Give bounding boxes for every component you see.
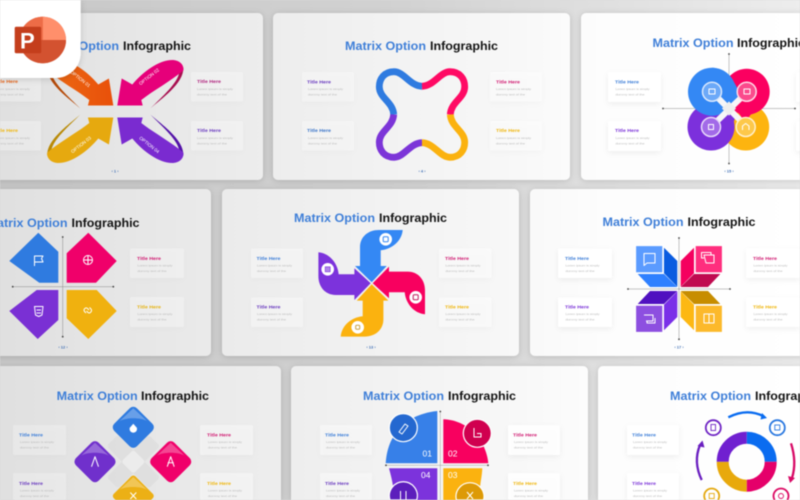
card: bottom right: Lorem ipsum is simply	[138, 312, 173, 316]
card: top left: Title Here	[256, 256, 281, 261]
chart: clover ribbon	[379, 72, 465, 157]
card: bottom right: dummy text of the	[138, 318, 167, 322]
title: Matrix Option	[363, 389, 444, 403]
card: bottom right: dummy text of the	[496, 142, 526, 146]
title: Matrix Option	[652, 36, 734, 50]
card: top right: Title Here	[137, 256, 162, 261]
option labels: OPTION 04	[138, 135, 161, 154]
panel: slide 13 pinwheel arrows	[222, 189, 519, 356]
quadrant 02 magenta	[443, 419, 491, 463]
card: top right: Lorem ipsum is simply	[197, 87, 234, 91]
card: top left: Title Here	[565, 256, 590, 261]
card: top left	[320, 425, 372, 455]
card: bottom left: dummy text of the	[20, 494, 50, 498]
arrow: purple arc	[697, 440, 704, 480]
card: bottom left: Title Here	[632, 481, 657, 486]
panel: slide donut	[598, 366, 800, 500]
card: top right: Title Here	[513, 432, 538, 438]
card: top left: Lorem ipsum is simply	[326, 440, 361, 444]
title: Infographic	[123, 39, 191, 53]
card: top left: Lorem ipsum is simply	[566, 264, 600, 268]
logo badge: PowerPoint	[0, 0, 81, 78]
card: top right	[439, 248, 492, 278]
card: top left	[608, 72, 661, 102]
card: bottom left: Title Here	[325, 481, 350, 486]
card: top left: Lorem ipsum is simply	[308, 87, 344, 91]
diamond: yellow	[113, 476, 154, 500]
title: Infographic	[141, 389, 209, 403]
title	[652, 36, 800, 50]
panel: slide 12 pentagons	[0, 189, 211, 356]
box: magenta	[681, 246, 722, 287]
arrow: purple	[318, 252, 371, 300]
title: Infographic	[688, 215, 756, 229]
card: bottom left: Title Here	[615, 128, 640, 133]
panel: slide numbered quadrants	[291, 366, 588, 500]
card: bottom left: dummy text of the	[566, 318, 595, 322]
title	[345, 39, 498, 53]
card: bottom right	[490, 121, 542, 150]
card: bottom left	[0, 121, 41, 150]
shape: yellow pentagon with link icon	[67, 290, 117, 339]
option labels: OPTION 02	[138, 67, 160, 86]
card: top right: dummy text of the	[138, 269, 167, 273]
axes	[662, 53, 796, 164]
card: bottom left: dummy text of the	[633, 494, 663, 498]
title	[0, 216, 140, 230]
card: bottom left: Lorem ipsum is simply	[633, 488, 668, 492]
card: top right: Title Here	[753, 256, 778, 261]
card: bottom right: dummy text of the	[208, 494, 238, 498]
card: top right: dummy text of the	[208, 446, 238, 450]
card: bottom right: Lorem ipsum is simply	[446, 312, 481, 316]
quadrant 01 blue: 01	[422, 448, 432, 458]
card: top right: Lorem ipsum is simply	[208, 440, 243, 444]
arrow: blue	[355, 230, 403, 282]
box: purple	[636, 291, 677, 332]
card: top right	[130, 248, 184, 278]
panel: slide 4 clover ribbon	[273, 13, 570, 180]
card: bottom left: Title Here	[565, 304, 590, 310]
page number: ‹ 13 ›	[366, 344, 376, 350]
card: bottom left: Lorem ipsum is simply	[308, 136, 344, 140]
diamond: magenta	[148, 439, 193, 484]
title: Matrix Option	[670, 389, 751, 403]
card: top left	[13, 425, 66, 455]
diamond: purple	[72, 439, 118, 484]
center diamond	[121, 450, 145, 474]
card: bottom right	[746, 298, 800, 327]
option labels: OPTION 03	[70, 135, 92, 154]
card: bottom right	[508, 473, 560, 500]
arrow: yellow	[341, 284, 388, 337]
card: top right: Title Here	[207, 432, 232, 438]
card: bottom right: Title Here	[445, 304, 470, 310]
card: bottom right: dummy text of the	[446, 318, 475, 322]
card: top left	[302, 72, 354, 102]
card: bottom right	[439, 298, 492, 327]
card: top left: dummy text of the	[566, 269, 595, 273]
card: bottom left: Lorem ipsum is simply	[20, 488, 55, 492]
card: bottom left	[251, 298, 303, 327]
card: bottom right: Title Here	[137, 304, 162, 310]
card: bottom left	[302, 121, 354, 150]
card: top right: Lorem ipsum is simply	[138, 264, 173, 268]
connector cross	[106, 435, 160, 489]
title	[670, 389, 800, 403]
shape: purple pentagon with shield icon	[9, 290, 58, 339]
card: top left: Lorem ipsum is simply	[616, 87, 650, 91]
card: bottom left: Lorem ipsum is simply	[257, 312, 293, 316]
option labels	[69, 67, 161, 154]
card: bottom right: Title Here	[496, 128, 521, 133]
card: bottom left: dummy text of the	[616, 142, 645, 146]
icon ring: yellow	[704, 488, 719, 500]
card: bottom left: Lorem ipsum is simply	[326, 488, 361, 492]
title	[602, 215, 756, 229]
card: top right: dummy text of the	[754, 269, 783, 273]
card: top left: dummy text of the	[633, 446, 663, 450]
title	[294, 211, 447, 225]
card: top right	[490, 72, 542, 102]
card: bottom left: Lorem ipsum is simply	[566, 312, 600, 316]
card: bottom left	[608, 121, 661, 151]
page number: ‹ 4 ›	[418, 168, 426, 174]
card: top right: Lorem ipsum is simply	[496, 87, 532, 91]
card: bottom left: dummy text of the	[326, 494, 356, 498]
card: right edge	[796, 72, 800, 151]
card: top left: dummy text of the	[616, 92, 645, 96]
card: bottom left: dummy text of the	[308, 142, 338, 146]
panel: slide 15 swirl circles	[581, 13, 800, 180]
card: top right	[508, 425, 560, 455]
arrow: option 04 purple	[117, 114, 183, 163]
card: top right: dummy text of the	[446, 269, 475, 273]
axes	[627, 237, 731, 340]
quadrant 01 blue	[386, 411, 437, 463]
card: top left: Lorem ipsum is simply	[20, 440, 55, 444]
icon ring: magenta	[774, 488, 788, 500]
card: top right: Lorem ipsum is simply	[446, 264, 481, 268]
icon ring: blue	[770, 420, 785, 435]
card: top left: dummy text of the	[257, 269, 287, 273]
card: bottom right: Lorem ipsum is simply	[514, 488, 549, 492]
title	[38, 39, 191, 53]
card: bottom left: dummy text of the	[257, 318, 287, 322]
title: Infographic	[72, 216, 140, 230]
card: top right: Title Here	[496, 80, 521, 84]
card: bottom left: Lorem ipsum is simply	[616, 136, 650, 140]
quadrant 03 yellow	[443, 468, 484, 500]
title: Matrix Option	[345, 39, 426, 53]
card: bottom left: Title Here	[307, 128, 332, 133]
card: bottom right: Lorem ipsum is simply	[496, 136, 532, 140]
card: bottom left	[13, 473, 66, 500]
icon ring: purple	[706, 420, 721, 435]
card: bottom left: Title Here	[256, 304, 281, 310]
card: top left	[558, 248, 612, 278]
card: bottom left	[320, 473, 372, 500]
card: top left: Title Here	[325, 432, 350, 438]
card: bottom right	[130, 297, 184, 327]
title: Matrix Option	[602, 215, 684, 229]
card: bottom right: dummy text of the	[514, 494, 544, 498]
card: bottom right: Title Here	[207, 481, 232, 486]
quadrant 02 magenta: 02	[448, 448, 458, 458]
card: top left: dummy text of the	[326, 446, 356, 450]
card: top right: Lorem ipsum is simply	[754, 264, 788, 268]
quadrant 03 yellow: 03	[448, 470, 458, 480]
card: top left: Title Here	[632, 432, 657, 438]
card: bottom right: Lorem ipsum is simply	[208, 488, 243, 492]
card: top left: dummy text of the	[20, 446, 50, 450]
chart: donut	[723, 438, 771, 486]
card: top right	[191, 72, 243, 102]
arrow: blue arc	[728, 412, 767, 420]
shape: blue pentagon with flag icon	[9, 233, 58, 283]
title: Infographic	[430, 39, 498, 53]
arrow: magenta arc	[788, 443, 795, 483]
card: top right: Title Here	[197, 79, 222, 84]
panel: slide 17 3d boxes	[530, 189, 800, 356]
chart: four swirl circles	[688, 68, 770, 150]
card: top left: Lorem ipsum is simply	[633, 440, 668, 444]
card: top right: Lorem ipsum is simply	[514, 440, 549, 444]
card: bottom right: Title Here	[513, 481, 538, 486]
axes	[12, 236, 114, 338]
card: bottom right: Lorem ipsum is simply	[197, 136, 234, 140]
card: top left	[251, 248, 303, 278]
card: bottom right: Title Here	[753, 304, 778, 310]
diamond: blue	[111, 405, 156, 450]
arrow: option 02 magenta	[117, 60, 183, 108]
card: top left: Lorem ipsum is simply	[257, 264, 293, 268]
card: bottom left	[627, 473, 679, 500]
title: Matrix Option	[294, 211, 375, 225]
title: Matrix Option	[38, 39, 119, 53]
icon: PowerPoint circle: P	[20, 28, 35, 54]
card: bottom right: dummy text of the	[754, 318, 783, 322]
card: bottom left: Title Here	[19, 481, 44, 486]
card: top left: dummy text of the	[308, 92, 338, 96]
panel: slide diamonds	[0, 366, 281, 500]
title: Matrix Option	[57, 389, 138, 403]
page number: ‹ 15 ›	[724, 168, 734, 174]
card: top left: Title Here	[615, 80, 640, 84]
title: Infographic	[448, 389, 516, 403]
card: bottom right	[200, 473, 253, 500]
box: blue	[636, 246, 677, 287]
card: top right	[746, 248, 800, 278]
quadrant 04 purple: 04	[421, 470, 431, 480]
card: bottom right: dummy text of the	[197, 142, 228, 146]
card: bottom right: Title Here	[197, 128, 222, 133]
title	[363, 389, 516, 403]
card: top left: Title Here	[19, 432, 44, 438]
card: top right: Title Here	[445, 256, 470, 261]
card: bottom right: Lorem ipsum is simply	[754, 312, 788, 316]
card: top left	[627, 425, 679, 455]
card: top left: Title Here	[307, 80, 332, 84]
arrow: magenta	[373, 267, 425, 314]
shape: magenta pentagon with globe icon	[67, 233, 117, 283]
page number: ‹ 12 ›	[58, 344, 68, 350]
card: top right	[200, 425, 253, 455]
card: bottom right	[191, 121, 243, 150]
box: yellow	[681, 291, 722, 332]
card: bottom left	[558, 298, 612, 327]
title: Infographic	[379, 211, 447, 225]
card: top left	[0, 72, 41, 102]
card: top right: dummy text of the	[496, 92, 526, 96]
axes	[385, 411, 489, 500]
quadrant 04 purple	[389, 468, 437, 500]
title	[57, 389, 209, 403]
card: top right: dummy text of the	[514, 446, 544, 450]
arrow: option 03 yellow	[47, 114, 113, 163]
arrow: option 01 orange	[47, 60, 113, 108]
panel: slide 1 curved arrows	[0, 13, 263, 180]
page number: ‹ 17 ›	[674, 344, 684, 350]
card: top right: dummy text of the	[197, 92, 228, 96]
page number: ‹ 1 ›	[111, 168, 119, 174]
option labels: OPTION 01	[69, 69, 92, 88]
